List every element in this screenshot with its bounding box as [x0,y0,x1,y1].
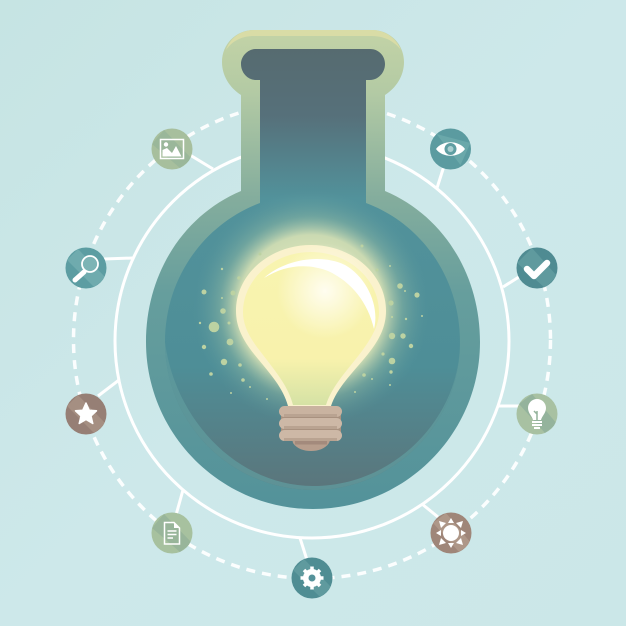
flask outer glass [146,30,480,509]
icon: gear [292,558,332,598]
icon: picture [152,128,192,170]
bulb hot spot [277,243,373,339]
icon: eye [430,128,471,170]
bulb outer glass [236,245,386,406]
icon: light bulb [516,394,558,434]
connector lines [98,155,522,560]
icon: star [66,394,106,434]
flask lip highlight [226,30,401,50]
light bulb [236,243,386,451]
white inner ring [115,144,509,538]
light glow [193,190,429,426]
icon: magnifier [66,248,106,288]
bulb base [279,406,342,451]
inner rim crescent [165,342,460,490]
icon: check mark [516,248,558,288]
icon: sun [430,512,472,554]
flask inner liquid [165,49,460,490]
flask [146,30,480,509]
icon: document [152,512,192,554]
sparkle particles [199,244,423,400]
bulb highlight [264,259,375,329]
infographic canvas [66,30,558,598]
dashed outer ring [74,102,550,578]
bulb inner fill [243,252,379,405]
